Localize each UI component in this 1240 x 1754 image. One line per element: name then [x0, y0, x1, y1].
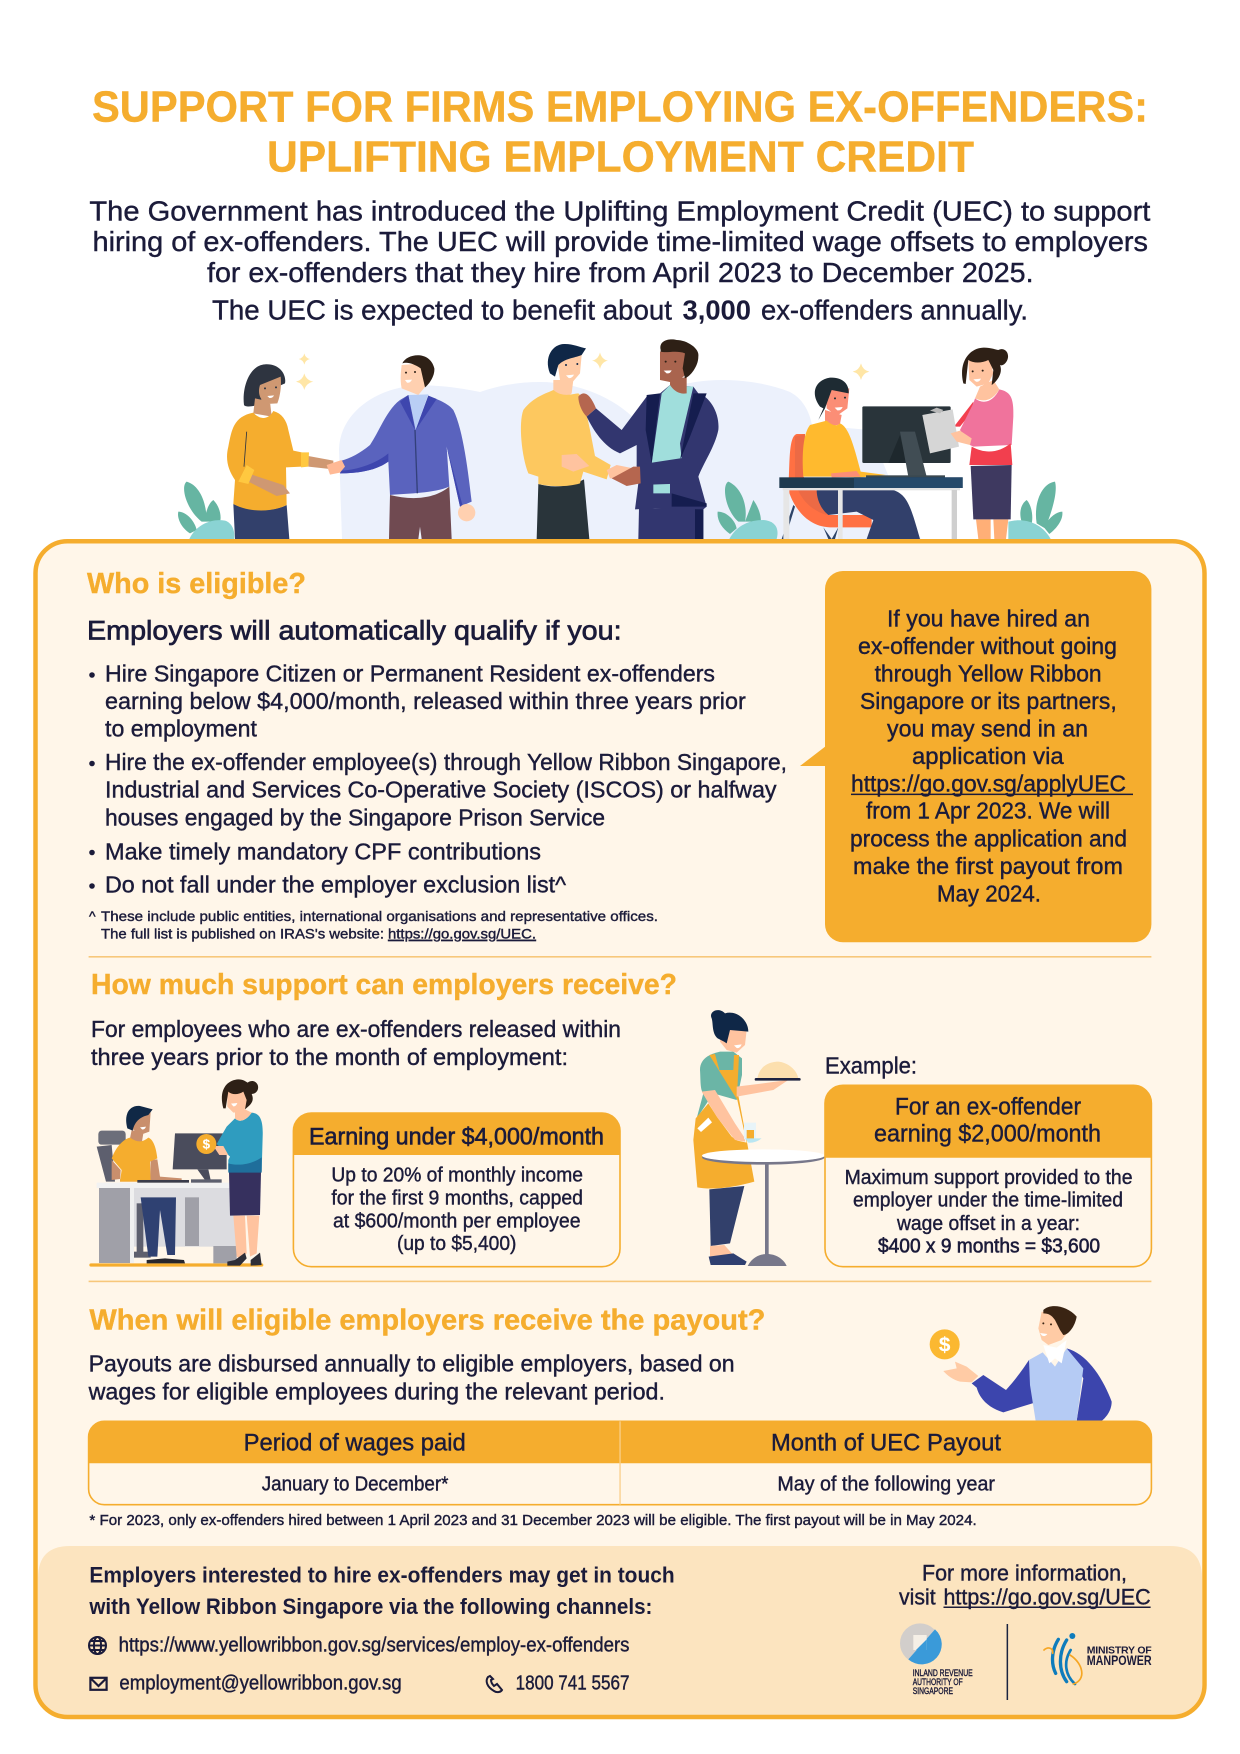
- footnote: exclusion list: The full list is published on IRAS's website:: [101, 926, 384, 942]
- title: SUPPORT FOR FIRMS EMPLOYING EX-OFFENDERS:: [92, 82, 1148, 131]
- text: contact invitation: [88, 1563, 675, 1619]
- intro text: 3,000: [682, 295, 751, 326]
- callout: apply without Yellow Ribbon: process the application and: [850, 826, 1127, 852]
- box: worked example: For an ex-offender: [895, 1093, 1081, 1120]
- callout: apply without Yellow Ribbon: If you have hired an: [887, 606, 1090, 632]
- heading: who is eligible: Who is eligible?: [87, 568, 306, 600]
- text: payout description: Payouts are disbursed annually to eligible employers, based on: [89, 1351, 735, 1377]
- icon: globe: [89, 1637, 106, 1654]
- panel: payout timing: [88, 1304, 765, 1404]
- logo: Ministry of Manpower: MANPOWER: [1087, 1652, 1152, 1668]
- table: payout schedule: [89, 1421, 1151, 1505]
- panel: contact footer band: [38, 1546, 1202, 1715]
- subheading: employers qualify: Employers will automatically qualify if you:: [87, 615, 622, 645]
- footnote: exclusion list: ^: [89, 908, 96, 924]
- text: payout description: [88, 1351, 735, 1404]
- callout: apply without Yellow Ribbon: ex-offender without going: [858, 633, 1117, 659]
- text: eligibility note: [91, 1016, 621, 1070]
- footnote: exclusion list: https://go.gov.sg/UEC.: [388, 926, 536, 942]
- logo: IRAS: AUTHORITY OF: [913, 1677, 963, 1688]
- heading: how much support: How much support can employers receive?: [91, 969, 677, 1001]
- logo: Ministry of Manpower: [1044, 1633, 1152, 1684]
- panel: example: [825, 1052, 1151, 1267]
- intro text: ex-offenders annually.: [761, 295, 1028, 326]
- illustration: woman and man shaking hands: [178, 353, 475, 539]
- box: worked example: employer under the time-limited: [853, 1190, 1123, 1212]
- logo: Ministry of Manpower: MINISTRY OF: [1087, 1644, 1152, 1656]
- bullet list: Industrial and Services Co-Operative Society (ISCOS) or halfway: [105, 777, 777, 803]
- panel: more information: visit: [899, 1584, 936, 1609]
- footnote: 2023 payout: * For 2023, only ex-offenders hired between 1 April 2023 and 31 December 2023 will be eligible. The first payout will be in May 2024.: [89, 1513, 977, 1529]
- bullet list: [89, 661, 787, 898]
- box: worked example: earning $2,000/month: [874, 1121, 1101, 1148]
- table: payout schedule: May of the following year: [777, 1473, 995, 1495]
- intro text: [89, 195, 1151, 326]
- text: contact invitation: with Yellow Ribbon Singapore via the following channels:: [88, 1594, 652, 1619]
- bullet list: to employment: [105, 716, 258, 742]
- heading: payout: When will eligible employers receive the payout?: [89, 1304, 765, 1336]
- title: [92, 82, 1148, 181]
- text: phone number: 1800 741 5567: [516, 1672, 630, 1694]
- callout: apply without Yellow Ribbon: application via: [912, 743, 1064, 769]
- panel: who is eligible: [87, 568, 787, 942]
- box: worked example: $400 x 9 months = $3,600: [878, 1236, 1100, 1258]
- callout: apply without Yellow Ribbon: Singapore or its partners,: [860, 688, 1117, 714]
- panel: more information: [899, 1561, 1151, 1609]
- panel: how much support: [91, 969, 677, 1070]
- bullet list: Hire the ex-offender employee(s) through Yellow Ribbon Singapore,: [105, 749, 787, 775]
- logo: IRAS: [900, 1623, 973, 1697]
- bullet list: Make timely mandatory CPF contributions: [105, 838, 541, 864]
- panel: earning under $4,000/month: at $600/month per employee: [333, 1210, 580, 1232]
- text: payout description: wages for eligible employees during the relevant period.: [88, 1378, 665, 1404]
- main card border: [36, 541, 1204, 1717]
- callout: apply without Yellow Ribbon: from 1 Apr 2023. We will: [866, 798, 1110, 824]
- icon: mail: [90, 1678, 107, 1690]
- intro text: hiring of ex-offenders. The UEC will provide time-limited wage offsets to employers: [92, 226, 1148, 257]
- footnote: exclusion list: These include public entities, international organisations and representative offices.: [101, 908, 658, 924]
- callout: apply without Yellow Ribbon: [800, 571, 1151, 942]
- box: worked example: Maximum support provided to the: [845, 1167, 1132, 1189]
- box: worked example: wage offset in a year:: [896, 1213, 1080, 1235]
- bullet list: Hire Singapore Citizen or Permanent Resident ex-offenders: [105, 661, 715, 687]
- callout: apply without Yellow Ribbon: https://go.gov.sg/applyUEC: [851, 771, 1126, 797]
- link: website: https://www.yellowribbon.gov.sg/services/employ-ex-offenders: [119, 1635, 629, 1657]
- logo: IRAS: INLAND REVENUE: [913, 1668, 973, 1679]
- text: eligibility note: three years prior to the month of employment:: [91, 1044, 568, 1070]
- callout: apply without Yellow Ribbon: make the first payout from: [853, 853, 1123, 879]
- illustration backdrop blob: [339, 380, 921, 539]
- link: email: employment@yellowribbon.gov.sg: [119, 1672, 402, 1694]
- text: eligibility note: For employees who are ex-offenders released within: [91, 1016, 621, 1042]
- table: payout schedule: Month of UEC Payout: [771, 1430, 1001, 1457]
- callout: apply without Yellow Ribbon: through Yellow Ribbon: [875, 661, 1102, 687]
- title: UPLIFTING EMPLOYMENT CREDIT: [267, 132, 974, 181]
- panel: earning under $4,000/month: for the first 9 months, capped: [331, 1187, 583, 1209]
- panel: earning under $4,000/month: Earning under $4,000/month: [309, 1123, 604, 1150]
- panel: earning under $4,000/month: (up to $5,400): [397, 1233, 516, 1255]
- intro text: for ex-offenders that they hire from April 2023 to December 2025.: [207, 257, 1034, 288]
- panel: more information: For more information,: [922, 1561, 1127, 1586]
- illustration: two men shaking hands: [521, 339, 778, 539]
- panel: more information: https://go.gov.sg/UEC: [944, 1584, 1151, 1609]
- panel: contact channels: [88, 1563, 675, 1694]
- illustration: man with coin: [930, 1306, 1112, 1421]
- intro text: The Government has introduced the Uplifting Employment Credit (UEC) to support: [89, 195, 1151, 226]
- illustration: office desk with coin: $: [203, 1137, 211, 1152]
- illustration: office worker at desk with colleague: [779, 348, 1062, 539]
- illustration: waitress with tray and table: [693, 1010, 825, 1266]
- illustration: office desk with coin: [89, 1079, 263, 1267]
- panel: main card: [36, 541, 1204, 1717]
- logo divider: [1007, 1624, 1008, 1700]
- illustration: man with coin: $: [939, 1334, 951, 1357]
- intro text: The UEC is expected to benefit about: [212, 295, 672, 326]
- callout: apply without Yellow Ribbon: May 2024.: [937, 880, 1041, 906]
- logo: IRAS: SINGAPORE: [913, 1686, 953, 1697]
- bullet list: Do not fall under the employer exclusion list^: [105, 872, 566, 898]
- bullet list: houses engaged by the Singapore Prison Service: [105, 804, 605, 830]
- divider: [89, 1281, 1151, 1282]
- box: worked example: [825, 1085, 1151, 1267]
- panel: earning under $4,000/month: Up to 20% of monthly income: [331, 1165, 583, 1187]
- icon: phone: [487, 1676, 502, 1692]
- footnote: exclusion list: [89, 908, 658, 942]
- text: contact invitation: Employers interested to hire ex-offenders may get in touch: [89, 1563, 675, 1588]
- panel: earning under $4,000/month: [293, 1113, 620, 1267]
- table: payout schedule: Period of wages paid: [244, 1430, 466, 1457]
- label: example: Example:: [825, 1052, 917, 1078]
- callout: apply without Yellow Ribbon: you may send in an: [887, 716, 1088, 742]
- table: payout schedule: January to December*: [262, 1473, 449, 1495]
- divider: [89, 956, 1151, 958]
- bullet list: earning below $4,000/month, released within three years prior: [105, 688, 746, 714]
